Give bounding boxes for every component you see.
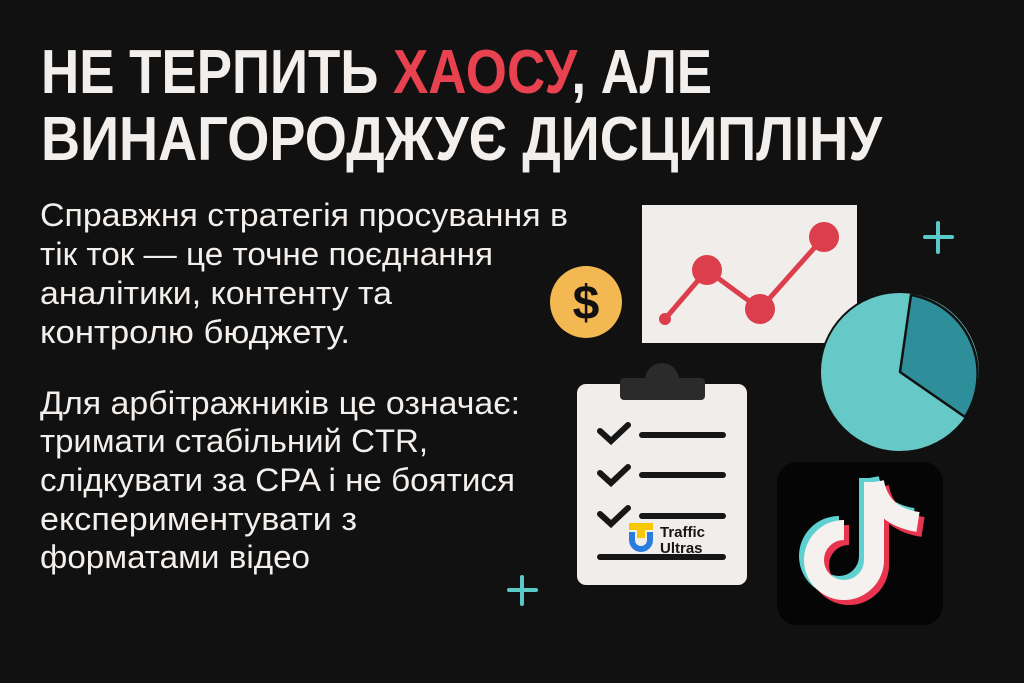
text block: paragraph 1: Справжня стратегія просування в [40, 197, 568, 233]
text block: paragraph 1: контролю бюджету. [40, 314, 350, 350]
text block: paragraph 1: аналітики, контенту та [40, 275, 392, 311]
title: НЕ ТЕРПИТЬ ХАОСУ, АЛЕ [41, 38, 712, 107]
text block: paragraph 2: тримати стабільний CTR, [40, 423, 428, 459]
icon: plus bottom [509, 577, 536, 604]
text block: paragraph 2: Для арбітражників це означає: [40, 385, 520, 421]
text block: paragraph 2: слідкувати за CPA і не боятися [40, 462, 515, 498]
title [41, 38, 883, 174]
text block: paragraph 2: експериментувати з [40, 501, 357, 537]
icon: dollar coin [550, 266, 622, 338]
logo: Traffic Ultras: Traffic [660, 524, 705, 541]
text block: paragraph 1 [40, 197, 568, 350]
text block: paragraph 2: форматами відео [40, 539, 310, 575]
logo: Traffic Ultras: Ultras [660, 540, 703, 557]
title: ВИНАГОРОДЖУЄ ДИСЦИПЛІНУ [41, 105, 883, 174]
icon: dollar coin: $ [573, 277, 600, 330]
icon: tiktok logo [777, 462, 943, 625]
chart: pie [820, 292, 980, 452]
chart: line chart card [642, 205, 857, 343]
icon: clipboard [577, 363, 747, 585]
text block: paragraph 1: тік ток — це точне поєднання [40, 236, 493, 272]
text block: paragraph 2 [40, 385, 520, 575]
icon: plus top right [925, 223, 952, 252]
logo: Traffic Ultras [629, 523, 705, 557]
